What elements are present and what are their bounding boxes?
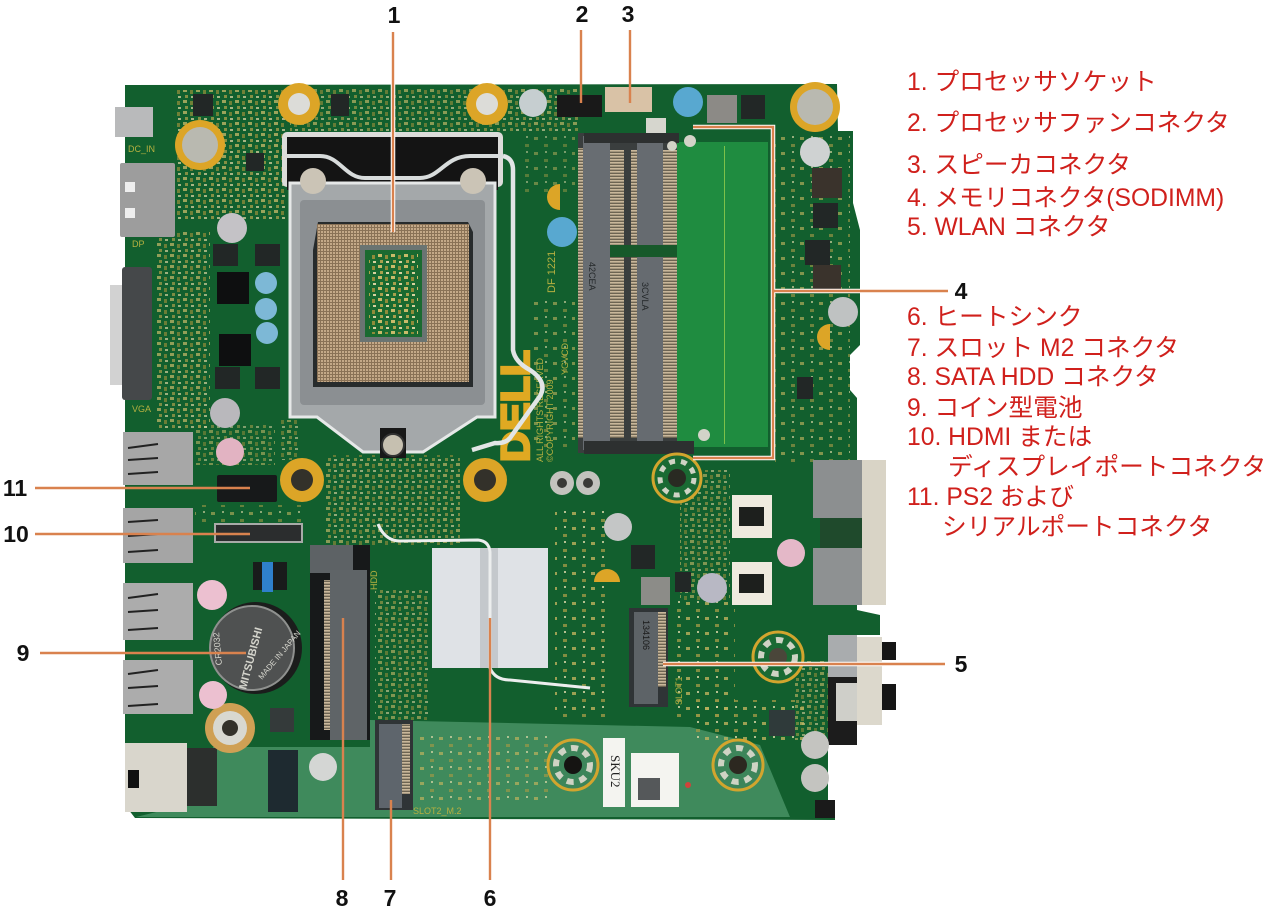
callout 9: 9	[17, 640, 29, 666]
legend list: 3. スピーカコネクタ	[907, 152, 1131, 179]
silkscreen labels: YGVCD	[560, 342, 570, 375]
callout 3: 3	[622, 1, 634, 27]
silkscreen labels: ©COPYRIGHT 2009	[545, 380, 555, 462]
coin battery: MITSUBISHI	[237, 626, 265, 691]
M.2 slot 1 connector: 134106	[641, 620, 651, 650]
legend list: 4. メモリコネクタ(SODIMM)	[907, 185, 1224, 212]
callout 7	[384, 800, 396, 911]
capacitors	[197, 87, 858, 792]
coin battery	[210, 602, 303, 694]
legend list: 9. コイン型電池	[907, 394, 1083, 422]
DC jack	[115, 107, 153, 137]
callout 11: 11	[3, 475, 27, 501]
labels on board	[603, 738, 691, 807]
callout 8: 8	[336, 885, 349, 911]
heat sink	[378, 524, 590, 688]
silkscreen labels: SLOT1	[674, 676, 684, 705]
speaker connector	[605, 87, 652, 112]
M.2 slot 1 connector	[629, 608, 668, 707]
DELL logo: DELL	[494, 350, 538, 462]
legend list: 5. WLAN コネクタ	[907, 214, 1110, 241]
coin battery: MADE IN JAPAN	[257, 629, 303, 681]
callout 1: 1	[388, 2, 401, 28]
SATA HDD connector	[310, 545, 370, 740]
legend list	[907, 68, 1266, 541]
right connectors	[813, 460, 896, 818]
LAN port	[125, 743, 217, 812]
silkscreen labels: DP	[132, 239, 145, 249]
silkscreen labels: DF 1221	[546, 251, 558, 293]
legend list: ディスプレイポートコネクタ	[948, 453, 1266, 481]
labels on board: SKU2	[608, 755, 623, 788]
left connectors	[110, 107, 217, 812]
silkscreen labels: SLOT2_M.2	[413, 806, 462, 816]
USB port 1	[123, 432, 193, 485]
legend list: 7. スロット M2 コネクタ	[907, 335, 1179, 362]
board: printed circuit board	[125, 84, 880, 820]
callout 6: 6	[484, 885, 496, 911]
processor socket	[282, 132, 503, 458]
silkscreen labels: VGA	[132, 404, 151, 414]
silkscreen labels	[128, 144, 684, 816]
silkscreen labels: HDD	[369, 570, 379, 590]
connector 11	[217, 475, 277, 502]
legend list: シリアルポートコネクタ	[942, 513, 1212, 541]
coin battery: CR2032	[211, 632, 224, 666]
callout 2	[576, 1, 588, 103]
USB port 3	[123, 583, 193, 640]
silkscreen labels: DC_IN	[128, 144, 155, 154]
blue jumper	[253, 562, 287, 592]
memory connector: 3CVLA	[640, 282, 650, 311]
silkscreen labels: ALL RIGHTS RESERVED	[535, 357, 545, 462]
legend list: 10. HDMI または	[907, 424, 1092, 451]
legend list: 2. プロセッサファンコネクタ	[907, 109, 1230, 137]
small chips	[193, 94, 842, 812]
memory connector	[578, 118, 768, 454]
socket lever wire	[472, 156, 542, 450]
callout 4: 4	[955, 278, 968, 304]
USB port 2	[123, 508, 193, 563]
callout 5: 5	[955, 651, 968, 677]
USB port 4	[123, 660, 193, 714]
memory connector: 42CEA	[587, 262, 597, 291]
legend list: 1. プロセッサソケット	[907, 68, 1157, 96]
M.2 slot 2 connector	[375, 720, 413, 810]
white power modules	[732, 495, 772, 605]
callout 4	[693, 127, 968, 458]
callout 7: 7	[384, 885, 396, 911]
callout 2: 2	[576, 1, 588, 27]
display port	[120, 163, 175, 237]
legend list: 8. SATA HDD コネクタ	[907, 364, 1159, 391]
fan connector	[557, 95, 602, 117]
connector 10	[215, 524, 302, 542]
callout 10: 10	[3, 521, 29, 547]
legend list: 6. ヒートシンク	[907, 304, 1083, 331]
callout 3	[622, 1, 634, 103]
mounting holes	[175, 82, 840, 790]
VGA port	[110, 285, 126, 385]
legend list: 11. PS2 および	[907, 484, 1074, 511]
